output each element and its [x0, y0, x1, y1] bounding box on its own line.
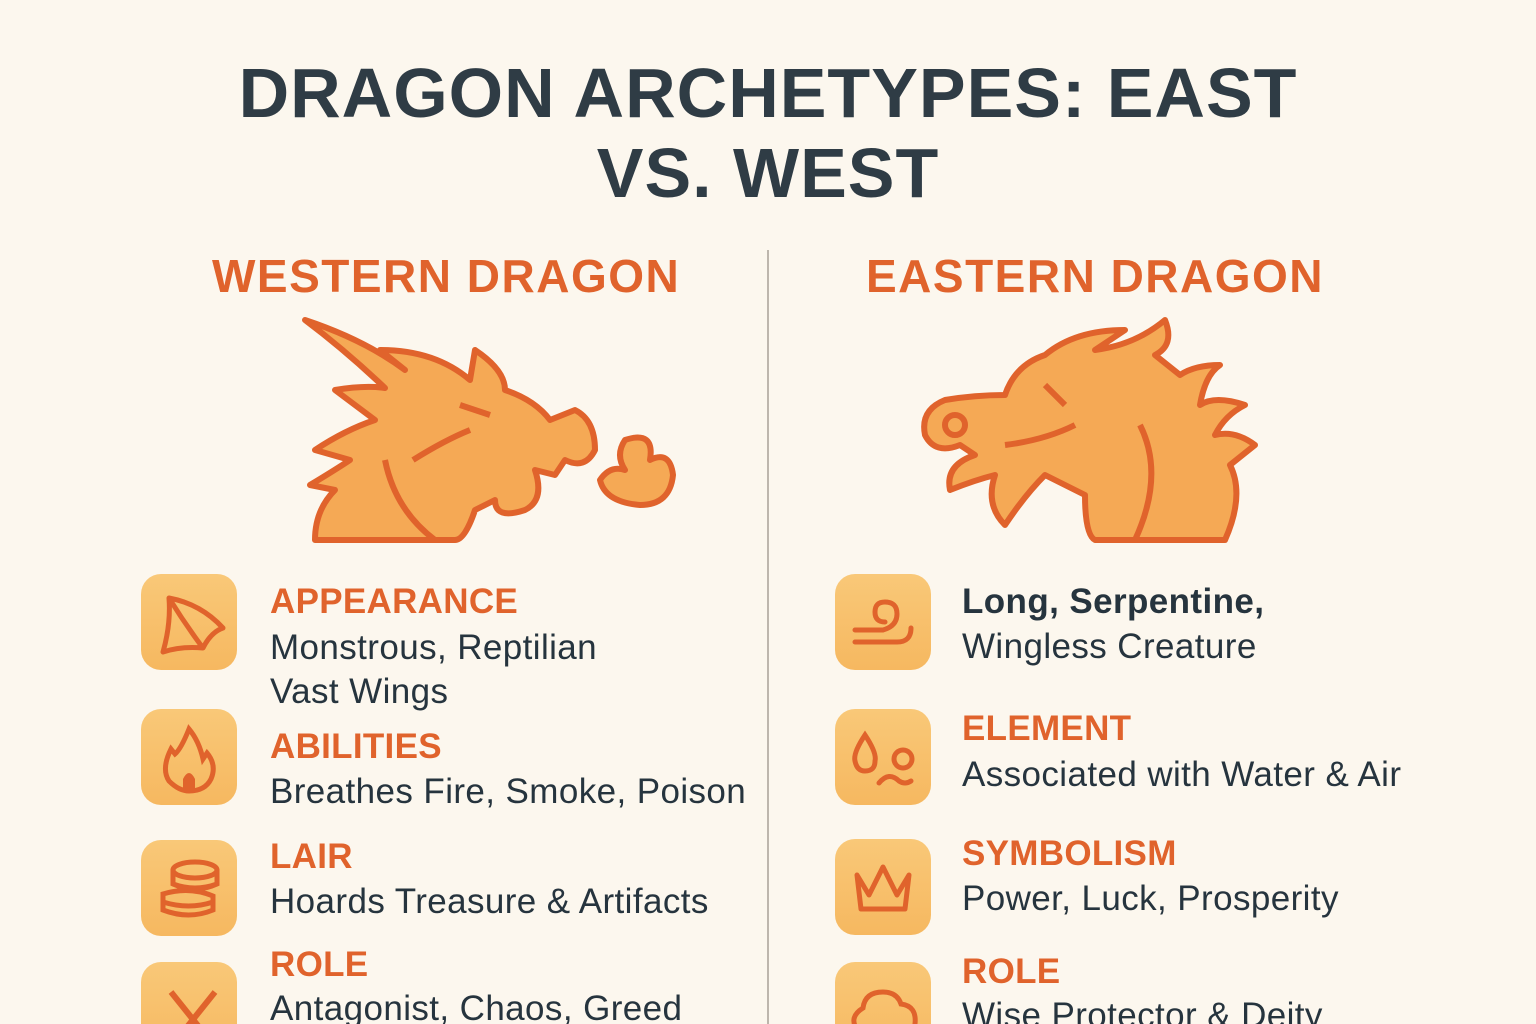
text: lair: LAIR	[270, 837, 353, 876]
icon: coins	[141, 840, 237, 936]
illustration: eastern dragon	[921, 317, 1258, 543]
text: lair	[270, 837, 709, 921]
text: appearance: Vast Wings	[270, 672, 448, 711]
heading: western: WESTERN DRAGON	[212, 250, 680, 302]
text: element: ELEMENT	[962, 709, 1131, 748]
text: abilities: ABILITIES	[270, 727, 442, 766]
icon: crown	[835, 839, 931, 935]
icon: wing	[141, 574, 237, 670]
text: symbolism: SYMBOLISM	[962, 834, 1177, 873]
text: role east: ROLE	[962, 952, 1060, 991]
illustration: western dragon	[302, 317, 676, 543]
text: symbolism	[962, 834, 1339, 918]
text: element: Associated with Water & Air	[962, 755, 1401, 794]
text: role west: ROLE	[270, 945, 368, 984]
text: abilities	[270, 727, 746, 811]
text: appearance	[270, 582, 597, 711]
icon: serpent swirl	[835, 574, 931, 670]
icon: cloud	[835, 962, 931, 1024]
title: DRAGON ARCHETYPES: EAST	[239, 54, 1297, 132]
text: appearance: Monstrous, Reptilian	[270, 628, 597, 667]
text: abilities: Breathes Fire, Smoke, Poison	[270, 772, 746, 811]
icon: swords	[141, 962, 237, 1024]
heading: eastern: EASTERN DRAGON	[866, 250, 1324, 302]
divider	[767, 250, 769, 1024]
icon: fire	[141, 709, 237, 805]
text: role east	[962, 952, 1323, 1024]
text: role west	[270, 945, 682, 1024]
title: VS. WEST	[597, 134, 939, 212]
text: appearance east: Wingless Creature	[962, 627, 1257, 666]
icon: water drop	[835, 709, 931, 805]
text: appearance east: Long, Serpentine,	[962, 582, 1264, 621]
text: element	[962, 709, 1401, 794]
text: appearance east	[962, 582, 1264, 666]
title	[239, 54, 1297, 212]
text: symbolism: Power, Luck, Prosperity	[962, 879, 1339, 918]
text: appearance: APPEARANCE	[270, 582, 518, 621]
text: lair: Hoards Treasure & Artifacts	[270, 882, 709, 921]
